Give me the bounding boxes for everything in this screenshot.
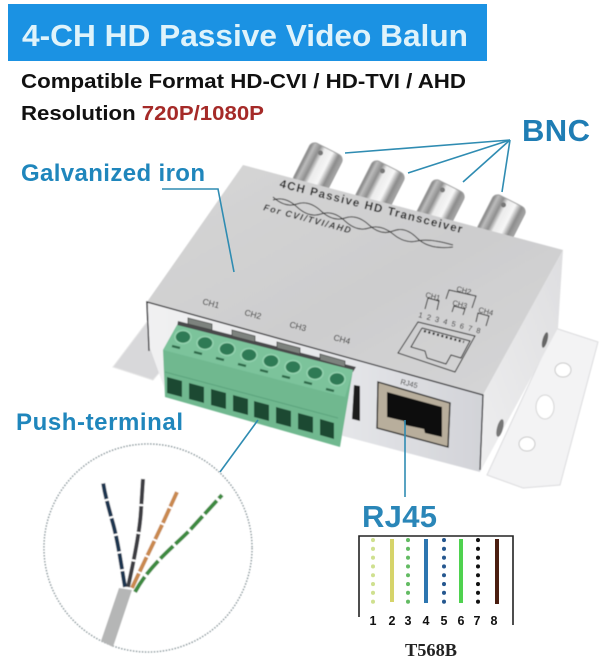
wiring diagram print: CH4 bbox=[478, 305, 494, 318]
title banner: 4-CH HD Passive Video Balun bbox=[22, 18, 468, 53]
right mounting flange bbox=[487, 328, 598, 488]
resolution text: Resolution 720P/1080P bbox=[21, 103, 264, 125]
wiring diagram print: CH1 bbox=[425, 290, 441, 303]
leader lines bbox=[162, 140, 510, 497]
pin numbers: 8 bbox=[491, 614, 498, 628]
right side face bbox=[480, 250, 563, 472]
compatible format text: Compatible Format HD-CVI / HD-TVI / AHD bbox=[21, 71, 466, 93]
pin numbers bbox=[370, 614, 498, 628]
wiring diagram print: CH2 bbox=[456, 284, 472, 297]
cable jacket bbox=[101, 588, 132, 647]
top face print: CH3 bbox=[288, 319, 308, 333]
label: push-terminal: Push-terminal bbox=[16, 409, 183, 436]
wiring diagram print: CH3 bbox=[452, 298, 468, 311]
terminal shadow and tabs bbox=[177, 318, 360, 421]
front face bbox=[147, 302, 483, 472]
label: BNC: BNC bbox=[522, 113, 590, 148]
blue pair bbox=[103, 482, 125, 587]
BNC connectors bbox=[291, 141, 527, 250]
pin numbers: 5 bbox=[441, 614, 448, 628]
terminal wire slots bbox=[167, 377, 334, 439]
top face print: 4CH Passive HD Transceiver bbox=[278, 178, 464, 236]
title banner bbox=[8, 4, 487, 61]
T568B pinout diagram bbox=[359, 536, 513, 660]
pin numbers: 2 bbox=[389, 614, 396, 628]
top face print: CH1 bbox=[201, 296, 221, 310]
pinout frame bbox=[359, 536, 513, 625]
terminal screw holes bbox=[175, 330, 345, 386]
cable detail circle bbox=[44, 444, 252, 652]
top face print: CH4 bbox=[332, 332, 352, 346]
label: RJ45: RJ45 bbox=[362, 499, 437, 534]
RJ45 port: RJ45 bbox=[400, 377, 419, 390]
pin numbers: 7 bbox=[474, 614, 481, 628]
wiring diagram print bbox=[398, 284, 494, 372]
label: galvanized iron: Galvanized iron bbox=[21, 160, 205, 187]
pin wires bbox=[373, 539, 497, 604]
grey pair bbox=[128, 479, 143, 587]
top face print: CH2 bbox=[243, 307, 263, 321]
orange pair bbox=[132, 492, 177, 588]
device: video balun bbox=[113, 141, 598, 488]
pin numbers: 3 bbox=[405, 614, 412, 628]
green push terminal block bbox=[163, 325, 353, 447]
wiring diagram print: 12345678 bbox=[417, 310, 482, 335]
front top edge bbox=[147, 302, 483, 470]
top face print bbox=[201, 178, 464, 346]
top face bbox=[147, 165, 563, 395]
terminal dash marks bbox=[172, 346, 334, 391]
RJ45 port bbox=[377, 377, 450, 447]
top face print: For CVI/TVI/AHD bbox=[262, 202, 352, 235]
left mounting flange bbox=[113, 322, 170, 380]
green pair bbox=[135, 495, 222, 592]
pin numbers: 1 bbox=[370, 614, 377, 628]
pin numbers: 6 bbox=[458, 614, 465, 628]
pin numbers: 4 bbox=[423, 614, 430, 628]
T568B caption: T568B bbox=[405, 640, 457, 660]
